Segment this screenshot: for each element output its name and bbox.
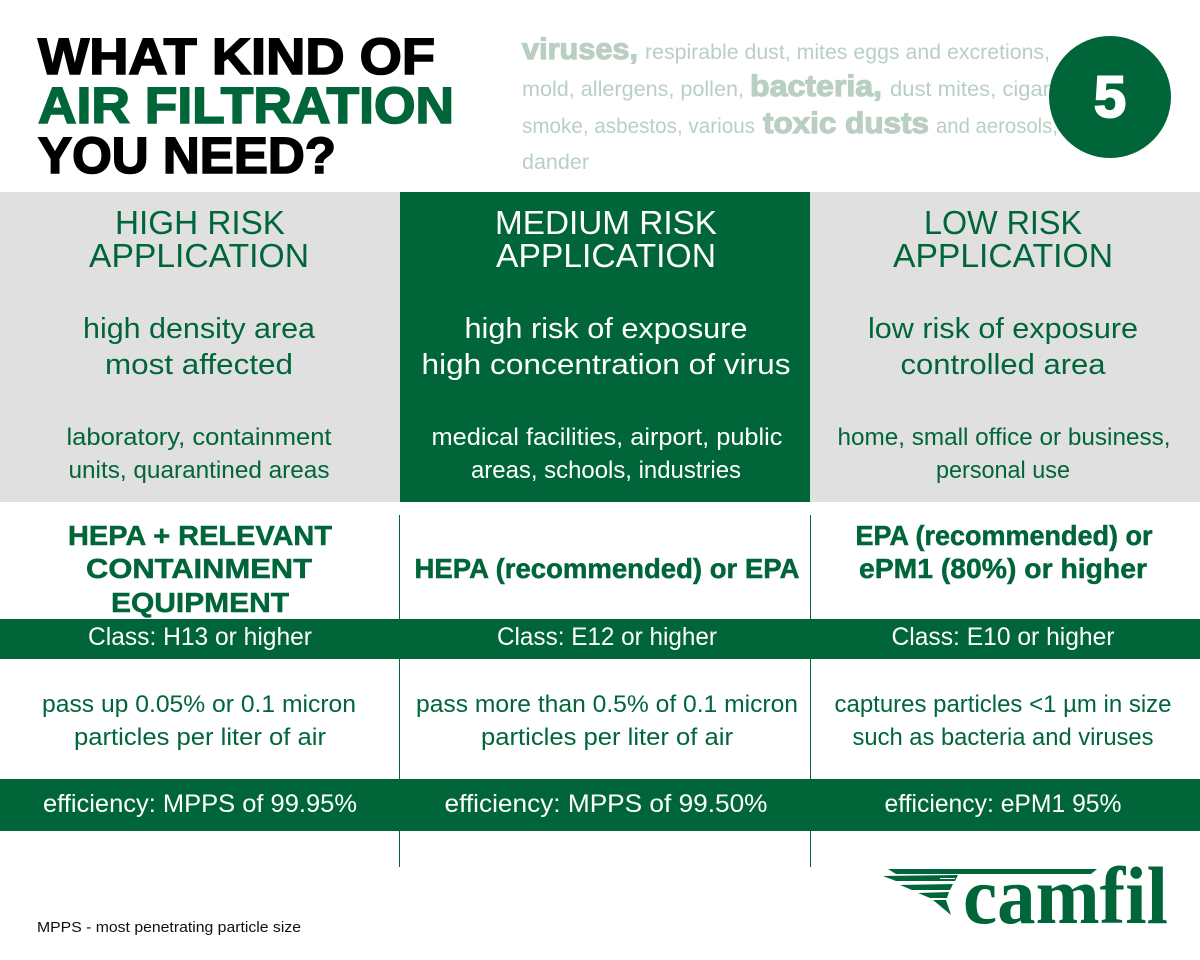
class band: Class: E12 or higher [497, 623, 717, 651]
panel: low risk application: home, small office or business, [838, 424, 1170, 451]
panel: low risk application: APPLICATION [893, 237, 1113, 274]
column dividers [399, 515, 811, 867]
medium risk filter description: pass more than 0.5% of 0.1 micron [416, 691, 798, 718]
efficiency band: efficiency: MPPS of 99.95% [43, 790, 357, 818]
contaminant word cloud: respirable dust, mites eggs and excretions, [645, 41, 1050, 64]
panel: high risk application: APPLICATION [89, 237, 309, 274]
title [38, 28, 454, 184]
panel: low risk application: controlled area [900, 349, 1106, 381]
logo: camfil [883, 850, 1168, 941]
logo: camfil: camfil [963, 850, 1168, 941]
title: WHAT KIND OF [38, 28, 435, 85]
number badge: 5: 5 [1094, 65, 1126, 130]
contaminant word cloud: bacteria, [750, 70, 882, 103]
class band [0, 619, 1200, 659]
low risk filter description: such as bacteria and viruses [852, 724, 1154, 751]
panel: low risk application [810, 192, 1200, 502]
high risk filter description: particles per liter of air [74, 724, 326, 751]
medium risk filter description: particles per liter of air [481, 724, 733, 751]
panel: high risk application: HIGH RISK [115, 204, 285, 241]
panel: high risk application: most affected [105, 349, 293, 381]
panel: low risk application: low risk of exposure [868, 313, 1138, 345]
footnote: MPPS - most penetrating particle size [37, 919, 301, 936]
class band: Class: E10 or higher [892, 623, 1114, 651]
class band: Class: H13 or higher [88, 623, 312, 651]
contaminant word cloud: mold, allergens, pollen, [522, 78, 744, 101]
panel: medium risk application [400, 192, 810, 502]
panel: high risk application: units, quarantined areas [68, 457, 330, 484]
efficiency band: efficiency: ePM1 95% [884, 790, 1122, 818]
title: YOU NEED? [38, 127, 336, 184]
contaminant word cloud: toxic dusts [763, 107, 929, 140]
panel: medium risk application: high risk of exposure [464, 313, 748, 345]
panel: low risk application: personal use [936, 457, 1070, 484]
number badge: 5 [1049, 36, 1171, 158]
efficiency band: efficiency: MPPS of 99.50% [444, 790, 768, 818]
efficiency band [0, 779, 1200, 831]
high risk filter description [42, 691, 356, 751]
high risk filter type: HEPA + RELEVANT [68, 520, 332, 551]
panel: high risk application: laboratory, containment [66, 424, 332, 451]
panel: medium risk application: APPLICATION [496, 237, 716, 274]
panel: high risk application [0, 192, 400, 502]
low risk filter type: EPA (recommended) or [856, 520, 1153, 551]
low risk filter description [834, 691, 1172, 751]
contaminant word cloud [522, 33, 1058, 174]
medium risk filter type: HEPA (recommended) or EPA [414, 553, 800, 584]
panel: medium risk application: MEDIUM RISK [495, 204, 717, 241]
low risk filter description: captures particles <1 µm in size [834, 691, 1172, 718]
panel: medium risk application: areas, schools, industries [471, 457, 741, 484]
high risk filter type: EQUIPMENT [111, 587, 289, 618]
panel: low risk application: LOW RISK [924, 204, 1082, 241]
contaminant word cloud: dander [522, 151, 589, 174]
contaminant word cloud: dust mites, cigar [890, 78, 1050, 101]
icon: camfil wing [883, 869, 1097, 915]
high risk filter type [68, 520, 332, 618]
low risk filter type: ePM1 (80%) or higher [859, 553, 1147, 584]
high risk filter description: pass up 0.05% or 0.1 micron [42, 691, 356, 718]
high risk filter type: CONTAINMENT [86, 553, 312, 584]
medium risk filter description [416, 691, 798, 751]
title: AIR FILTRATION [38, 77, 454, 134]
low risk filter type [856, 520, 1153, 584]
contaminant word cloud: smoke, asbestos, various [522, 115, 755, 138]
contaminant word cloud: and aerosols, [936, 115, 1058, 138]
panel: medium risk application: high concentration of virus [422, 349, 790, 381]
panel: medium risk application: medical facilities, airport, public [432, 424, 782, 451]
panel: high risk application: high density area [83, 313, 316, 345]
contaminant word cloud: viruses, [522, 33, 638, 66]
